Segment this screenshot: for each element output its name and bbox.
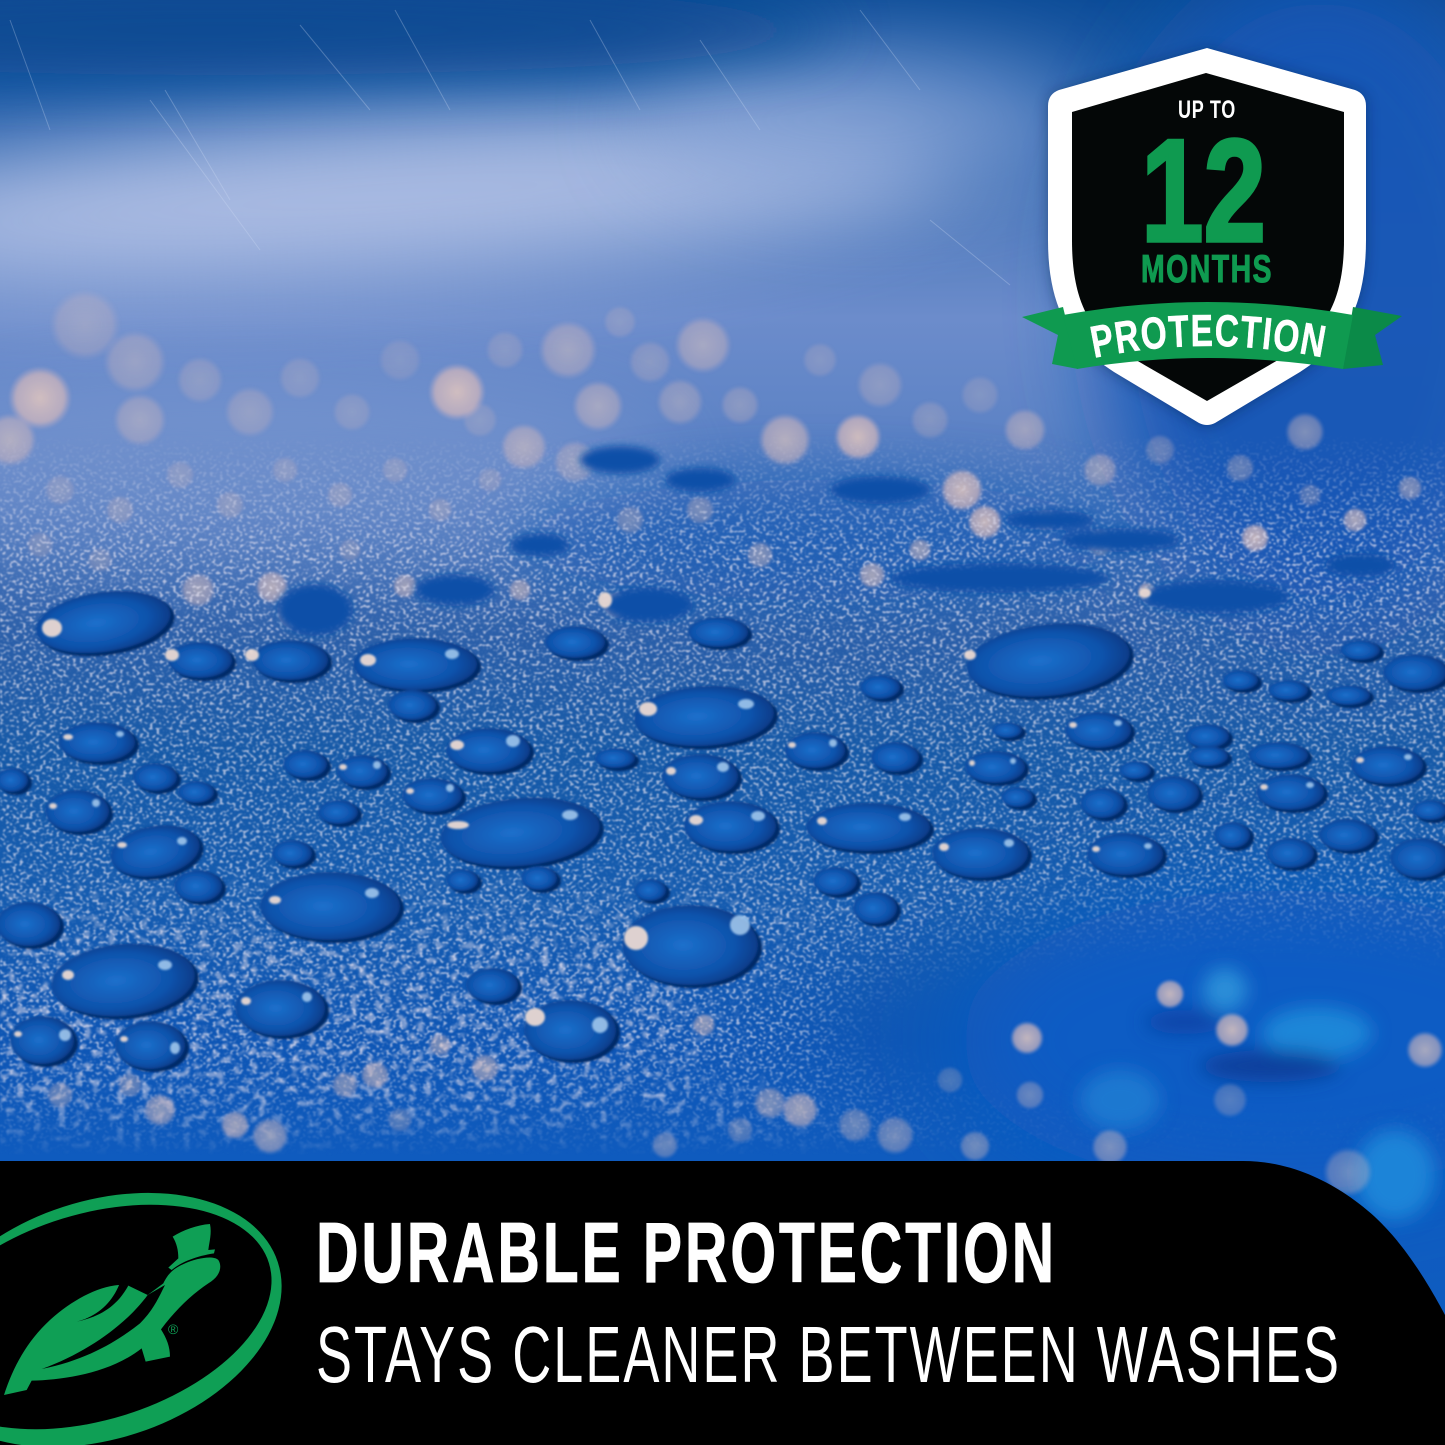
micro droplet speckle field: [0, 442, 1445, 1149]
headline: DURABLE PROTECTION: [316, 1206, 1057, 1301]
badge text: up to: UP TO: [1178, 96, 1236, 124]
water bead shadows: [0, 586, 1445, 1072]
near out-of-focus bokeh: [46, 979, 1444, 1197]
near out-of-focus soft blue blobs: [1080, 968, 1435, 1220]
rain streaks: [10, 10, 1010, 285]
badge text: months: MONTHS: [1141, 248, 1273, 291]
bead highlights: warm left glints: [14, 588, 1364, 1042]
oval ring: [0, 1149, 315, 1445]
water beads: [0, 583, 1445, 1069]
far bokeh highlights: [0, 289, 1423, 629]
mid-distance blurred beads: [277, 446, 1395, 636]
bead highlights: cool right glints: [59, 649, 1412, 1054]
badge: up to 12 months protection: [1022, 44, 1402, 432]
foreground soft droplet speckle: [0, 874, 1020, 1151]
logo: turtle in oval: [0, 1149, 315, 1445]
badge number: 12: 12: [1141, 109, 1266, 272]
ribbon: [1022, 302, 1402, 369]
ribbon text: protection: PROTECTION: [1090, 314, 1326, 358]
icon: turtle with top hat: [4, 1224, 220, 1395]
shield: [1048, 48, 1366, 425]
registered mark: ®: [168, 1321, 179, 1337]
black footer panel: [0, 1161, 1445, 1445]
